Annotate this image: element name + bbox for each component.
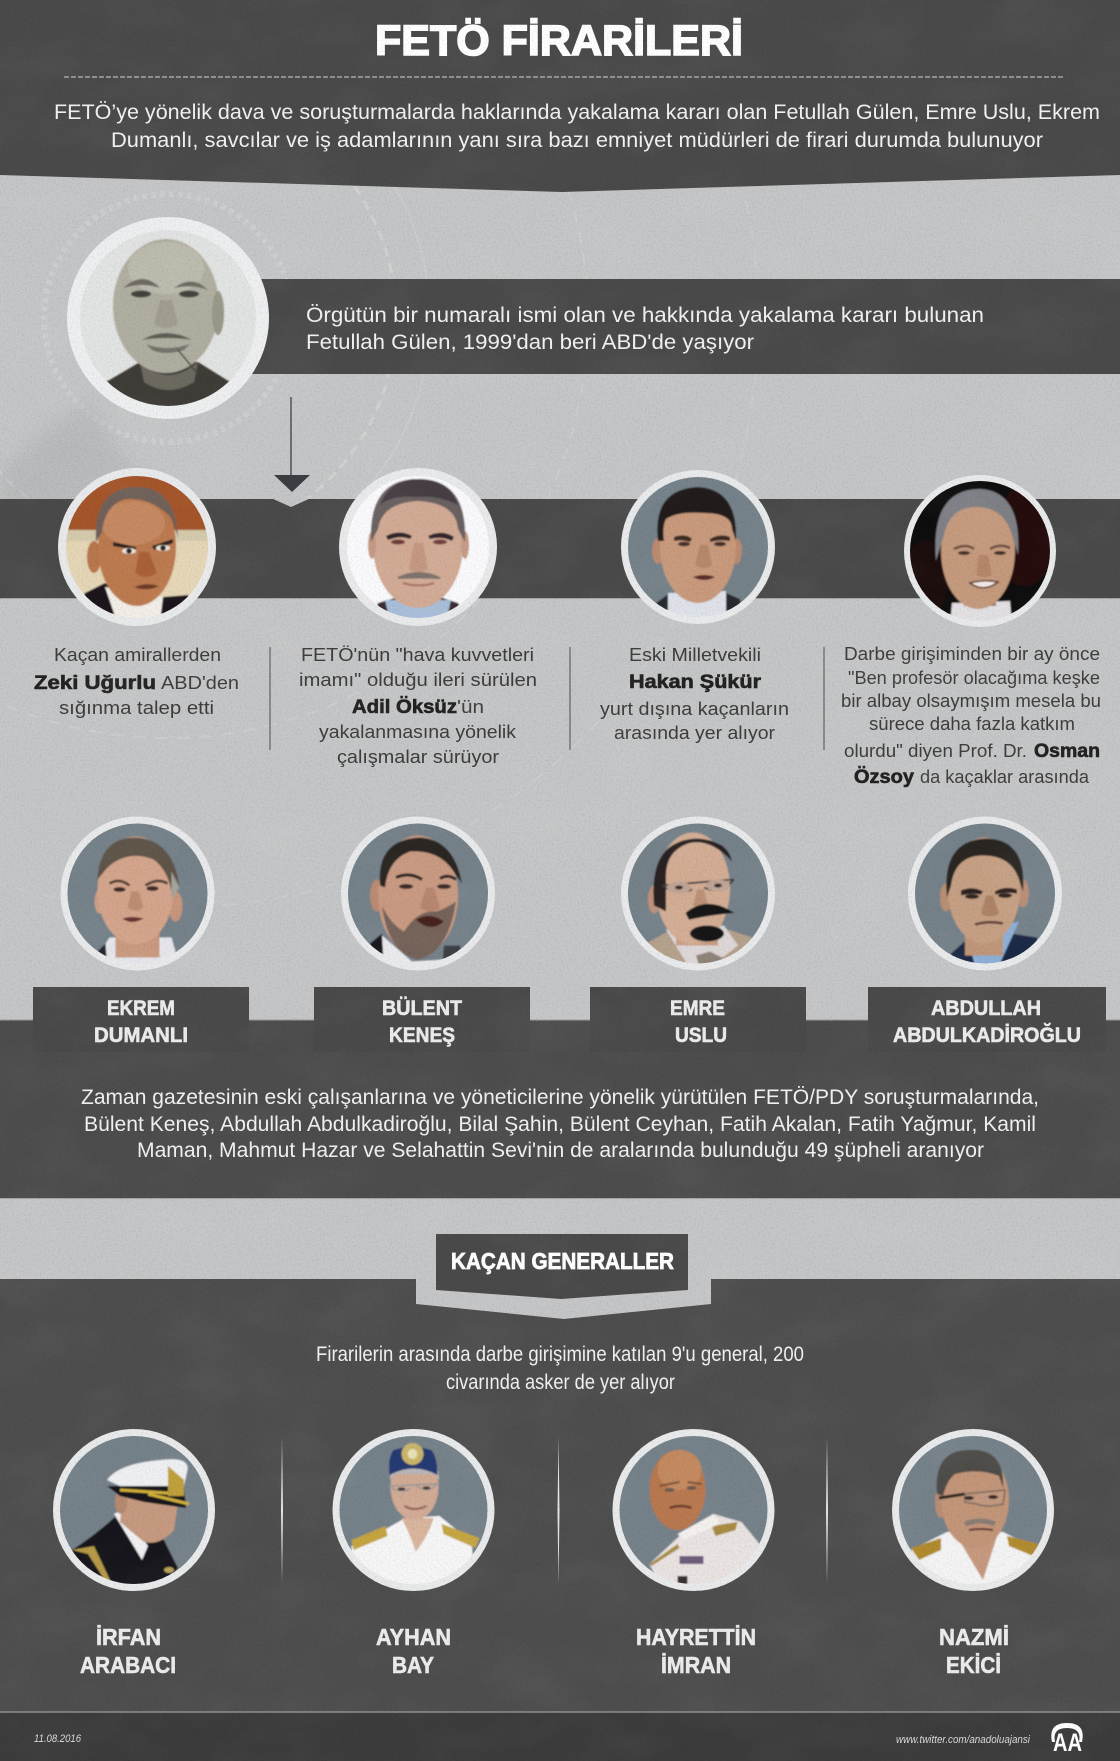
Gülen text: Fetullah Gülen, 1999'dan beri ABD'de yaşıyor [306, 331, 754, 354]
name box: Ekrem Dumanlı: DUMANLI [94, 1024, 188, 1047]
portrait: Ekrem Dumanlı [60, 816, 214, 970]
title: FETÖ FİRARİLERİ [375, 17, 743, 65]
text: Osman Özsoy [841, 644, 1101, 788]
text: Osman Özsoy: Darbe girişiminden bir ay önce [844, 644, 1100, 664]
name: Ayhan Bay: AYHAN [376, 1624, 451, 1650]
text: Adil Öksüz: Adil Öksüz [352, 697, 457, 718]
name box: Bülent Keneş: BÜLENT [382, 997, 462, 1020]
divider [826, 1437, 828, 1584]
heading: Kaçan Generaller: KAÇAN GENERALLER [451, 1248, 674, 1274]
portrait: Zeki Uğurlu [58, 468, 216, 627]
text: Osman Özsoy: Özsoy [854, 767, 914, 788]
Gülen text [306, 304, 984, 354]
header panel [0, 0, 1120, 192]
footer date: 11.08.2016 [34, 1733, 82, 1745]
heading: Kaçan Generaller [436, 1234, 688, 1299]
faint shadow shape [0, 400, 150, 520]
portrait: Emre Uslu [621, 816, 775, 970]
name: Hayrettin İmran: HAYRETTİN [636, 1624, 756, 1650]
name: Hayrettin İmran: İMRAN [661, 1652, 731, 1678]
portrait: Osman Özsoy [903, 475, 1056, 627]
band notch [271, 498, 311, 507]
panel: Gülen band [240, 279, 1120, 374]
icon: AA logo [1051, 1723, 1083, 1757]
text: Zeki Uğurlu: ABD'den [161, 673, 239, 693]
name: Ayhan Bay [376, 1624, 451, 1678]
panel: Zaman band [0, 987, 1120, 1198]
portrait: Adil Öksüz [339, 468, 497, 626]
text: Adil Öksüz: imamı" olduğu ileri sürülen [299, 670, 537, 690]
name box: Bülent Keneş: KENEŞ [389, 1024, 455, 1047]
Gülen text: Örgütün bir numaralı ismi olan ve hakkında yakalama kararı bulunan [306, 304, 984, 327]
portrait: Nazmi Ekici [892, 1429, 1054, 1591]
generals paragraph: Firarilerin arasında darbe girişimine katılan 9'u general, 200 [316, 1343, 804, 1366]
name: Nazmi Ekici [939, 1624, 1009, 1678]
name box: Abdullah Abdulkadiroğlu: ABDULLAH [931, 997, 1041, 1020]
divider [269, 647, 271, 750]
generals paragraph [316, 1343, 804, 1394]
text: Osman Özsoy: sürece daha fazla katkım [869, 714, 1075, 734]
icon: AA logo: AA [1053, 1729, 1082, 1757]
text: Adil Öksüz: yakalanmasına yönelik [319, 722, 517, 742]
name: Hayrettin İmran [636, 1624, 756, 1678]
text: Hakan Şükür: arasında yer alıyor [614, 723, 775, 743]
text: Zeki Uğurlu [34, 645, 239, 718]
Zaman paragraph: Zaman gazetesinin eski çalışanlarına ve yöneticilerine yönelik yürütülen FETÖ/PDY soruşturmalarında, [81, 1086, 1039, 1109]
text: Zeki Uğurlu: Zeki Uğurlu [34, 673, 156, 694]
text: Osman Özsoy: Osman [1034, 741, 1100, 762]
generals paragraph: civarında asker de yer alıyor [446, 1371, 675, 1394]
text: Adil Öksüz [299, 645, 537, 767]
Zaman paragraph: Maman, Mahmut Hazar ve Selahattin Sevi'nin de aralarında bulunduğu 49 şüpheli aranıyor [137, 1139, 984, 1162]
name: Ayhan Bay: BAY [392, 1652, 434, 1678]
name box: Ekrem Dumanlı: EKREM [107, 997, 175, 1020]
divider [281, 1437, 283, 1584]
text: Hakan Şükür: yurt dışına kaçanların [600, 699, 789, 719]
text: Adil Öksüz: FETÖ'nün "hava kuvvetleri [301, 645, 534, 665]
divider [823, 647, 825, 750]
name: İrfan Arabacı [80, 1624, 176, 1678]
heading collar [416, 1278, 711, 1319]
text: Osman Özsoy: "Ben profesör olacağıma keşke [848, 668, 1100, 688]
portrait: Hakan Şükür [621, 470, 775, 624]
panel: generals section [0, 1234, 1120, 1712]
name box: Emre Uslu: USLU [675, 1024, 727, 1047]
text: Hakan Şükür: Eski Milletvekili [629, 645, 761, 665]
text: Osman Özsoy: da kaçaklar arasında [920, 767, 1090, 787]
portrait: İrfan Arabacı [53, 1429, 215, 1591]
portrait: Hayrettin İmran [612, 1429, 774, 1591]
portrait: Fetullah Gülen [67, 217, 269, 419]
portrait: Bülent Keneş [341, 816, 495, 970]
footer [0, 1712, 1120, 1761]
name box: Ekrem Dumanlı [33, 987, 249, 1052]
arrow [274, 397, 310, 492]
text: Hakan Şükür: Hakan Şükür [629, 672, 762, 693]
name box: Abdullah Abdulkadiroğlu: ABDULKADİROĞLU [893, 1023, 1081, 1047]
Zaman paragraph: Bülent Keneş, Abdullah Abdulkadiroğlu, Bilal Şahin, Bülent Ceyhan, Fatih Akalan, Fatih Yağmur, Kamil [84, 1113, 1036, 1136]
text: Osman Özsoy: olurdu" diyen Prof. Dr. [844, 741, 1027, 761]
name: Nazmi Ekici: EKİCİ [946, 1652, 1001, 1678]
text: Hakan Şükür [600, 645, 789, 743]
name: İrfan Arabacı: İRFAN [96, 1624, 161, 1650]
name box: Bülent Keneş [314, 987, 530, 1052]
name: İrfan Arabacı: ARABACI [80, 1652, 176, 1678]
text: Osman Özsoy: bir albay olsaymışım mesela bu [841, 691, 1101, 711]
name box: Abdullah Abdulkadiroğlu [868, 987, 1106, 1052]
dashed background arcs [0, 0, 758, 908]
general names [80, 1624, 1009, 1678]
divider [558, 1437, 560, 1584]
title divider [64, 76, 1064, 78]
portrait: Ayhan Bay [332, 1429, 494, 1591]
name: Nazmi Ekici: NAZMİ [939, 1624, 1009, 1650]
portrait: Abdullah Abdulkadiroğlu [908, 816, 1062, 970]
intro text: FETÖ’ye yönelik dava ve soruşturmalarda haklarında yakalama kararı olan Fetullah Gülen, Emre Uslu, Ekrem [54, 101, 1100, 124]
name box: Emre Uslu: EMRE [670, 997, 725, 1020]
text: Adil Öksüz: çalışmalar sürüyor [337, 747, 499, 767]
Zaman paragraph [81, 1086, 1039, 1162]
text: Zeki Uğurlu: Kaçan amirallerden [54, 645, 221, 665]
panel: first row band [0, 498, 1120, 598]
text: Zeki Uğurlu: sığınma talep etti [59, 698, 214, 718]
footer twitter address: www.twitter.com/anadoluajansi [896, 1734, 1030, 1746]
intro text [54, 101, 1100, 152]
divider [569, 647, 571, 750]
intro text: Dumanlı, savcılar ve iş adamlarının yanı sıra bazı emniyet müdürleri de firari durumda bulunuyor [111, 129, 1043, 152]
name box: Emre Uslu [590, 987, 806, 1052]
text: Adil Öksüz: 'ün [457, 697, 484, 717]
